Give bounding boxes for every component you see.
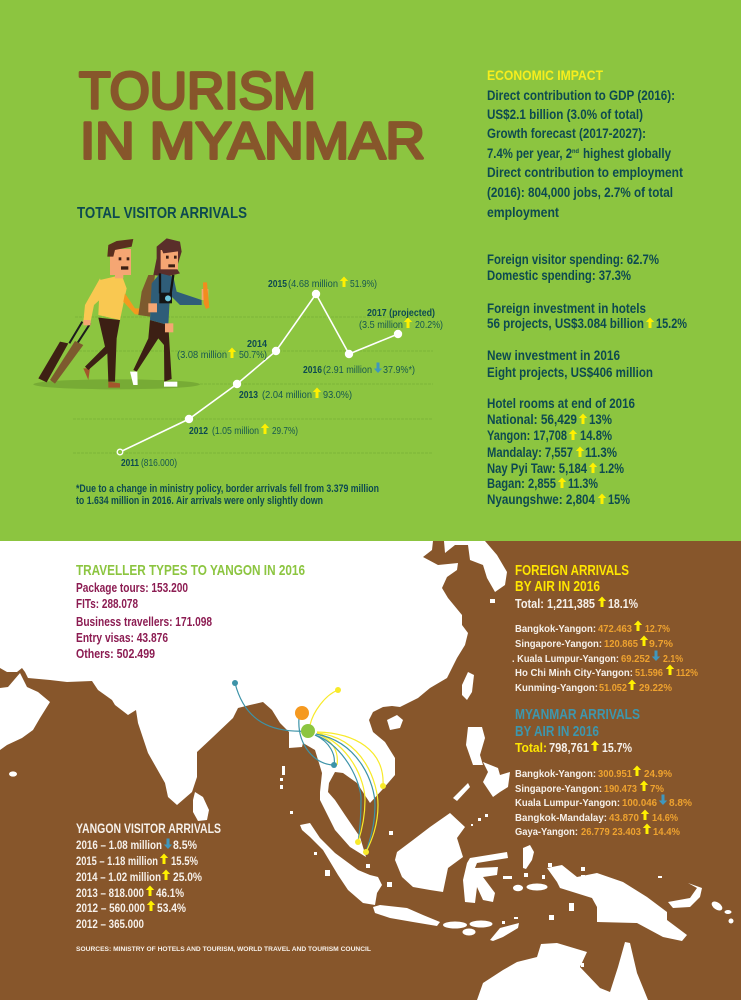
text block: foreign investment in hotels: 15.2%	[656, 316, 687, 331]
data label: 2015	[268, 276, 377, 290]
total: Myanmar arrivals	[515, 740, 632, 755]
heading: foreign arrivals: BY AIR IN 2016	[515, 579, 600, 595]
text block: hotel rooms: 15%	[608, 492, 630, 507]
list: foreign routes: 51.052	[599, 682, 627, 694]
text block: hotel rooms: National: 56,429	[487, 412, 577, 427]
data label: 2012: 29.7%)	[272, 425, 298, 437]
list: Myanmar routes: Bangkok-Yangon:	[515, 768, 596, 780]
text block: hotel rooms: 11.3%	[585, 445, 617, 460]
illustration: two travellers with suitcase	[33, 238, 209, 389]
list: Myanmar routes: Singapore-Yangon:	[515, 783, 602, 795]
data label: 2014: (3.08 million	[177, 349, 227, 361]
data label: 2013: 93.0%)	[323, 389, 352, 401]
text block: hotel rooms: Mandalay: 7,557	[487, 445, 573, 460]
list: Yangon arrivals by year: 15.5%	[171, 856, 198, 868]
data label: 2014: 2014	[247, 338, 267, 350]
list: Myanmar routes: 100.046	[622, 797, 657, 809]
heading: Myanmar arrivals: MYANMAR ARRIVALS	[515, 707, 640, 723]
data label: 2011: (816.000)	[141, 457, 177, 469]
text block: GDP, growth and employment: (2016): 804,000 jobs, 2.7% of total	[487, 185, 673, 200]
heading: economic impact: ECONOMIC IMPACT	[487, 67, 603, 83]
text block: hotel rooms: 11.3%	[568, 476, 598, 491]
data label: 2017 projected: 2017 (projected)	[367, 307, 435, 319]
text block: foreign investment in hotels	[487, 301, 687, 331]
data label: 2015: 2015	[268, 278, 287, 290]
data label: 2015: 51.9%)	[350, 278, 377, 290]
text block: new investment: New investment in 2016	[487, 348, 620, 363]
list: foreign routes: Bangkok-Yangon:	[515, 623, 596, 635]
list: Myanmar routes: 26.779 23.403	[581, 826, 641, 838]
list: foreign routes: 51.596	[635, 667, 663, 679]
list: Myanmar routes: Bangkok-Mandalay:	[515, 812, 607, 824]
data label: 2017 projected	[359, 307, 443, 331]
list: Yangon arrivals by year: 2014 – 1.02 million	[76, 872, 161, 884]
list: foreign routes: 69.252	[621, 653, 650, 665]
panel: Myanmar arrivals by air	[515, 707, 693, 838]
list: traveller types: Package tours: 153.200	[76, 581, 188, 595]
footnote	[76, 483, 379, 507]
list: foreign routes	[512, 620, 699, 694]
list: Yangon arrivals by year: 2013 – 818.000	[76, 888, 144, 900]
text block: hotel rooms: 14.8%	[580, 428, 612, 443]
list: Yangon arrivals by year: 46.1%	[156, 888, 184, 900]
text block: GDP, growth and employment: nd	[572, 149, 579, 155]
list: foreign routes: Singapore-Yangon:	[515, 638, 602, 650]
text block: foreign investment in hotels: 56 projects, US$3.084 billion	[487, 316, 644, 331]
panel: foreign arrivals by air	[512, 563, 699, 694]
panel: traveller types to Yangon	[76, 562, 305, 661]
footnote: *Due to a change in ministry policy, border arrivals fell from 3.379 million	[76, 483, 379, 495]
heading: foreign arrivals: FOREIGN ARRIVALS	[515, 563, 629, 579]
list: Yangon arrivals by year	[76, 838, 202, 931]
text block: hotel rooms: Yangon: 17,708	[487, 428, 567, 443]
text block: new investment	[487, 348, 653, 380]
heading: Myanmar arrivals: BY AIR IN 2016	[515, 724, 599, 740]
list: Myanmar routes: 14.4%	[653, 826, 681, 838]
total: foreign arrivals: Total: 1,211,385	[515, 596, 595, 611]
list: Myanmar routes: Kuala Lumpur-Yangon:	[515, 797, 620, 809]
data label: 2016: 2016	[303, 364, 322, 376]
data label: 2016	[303, 362, 415, 376]
data label: 2012: 2012	[189, 425, 208, 437]
title: IN MYANMAR	[80, 112, 425, 170]
line chart: total visitor arrivals	[73, 276, 443, 469]
list: foreign routes: 9.7%	[649, 638, 674, 650]
list: Myanmar routes: 24.9%	[644, 768, 673, 780]
text block: spending split: Domestic spending: 37.3%	[487, 268, 631, 283]
text block: GDP, growth and employment	[487, 88, 683, 220]
list: foreign routes: 2.1%	[663, 653, 684, 665]
heading: traveller types: TRAVELLER TYPES TO YANGON IN 2016	[76, 562, 305, 579]
list: foreign routes: Kunming-Yangon:	[515, 682, 598, 694]
list: Myanmar routes: 190.473	[604, 783, 637, 795]
text block: GDP, growth and employment: employment	[487, 205, 559, 220]
list: Myanmar routes: 8.8%	[669, 797, 693, 809]
heading: total visitor arrivals: TOTAL VISITOR ARRIVALS	[77, 205, 247, 222]
heading: Myanmar arrivals	[515, 707, 640, 740]
text block: GDP, growth and employment: Direct contribution to GDP (2016):	[487, 88, 675, 103]
data label: 2013: (2.04 million	[262, 389, 312, 401]
list: Myanmar routes: 43.870	[609, 812, 639, 824]
panel: green header background	[0, 0, 741, 541]
list: foreign routes: 112%	[676, 667, 699, 679]
data label: 2015: (4.68 million	[288, 278, 338, 290]
list: Myanmar routes: 300.951	[598, 768, 632, 780]
data label: 2016: 37.9%*)	[383, 364, 415, 376]
list: foreign routes: 120.865	[604, 638, 638, 650]
title: TOURISM	[79, 62, 316, 120]
text block: GDP, growth and employment: Direct contribution to employment	[487, 165, 683, 180]
flight routes from Myanmar	[232, 680, 386, 855]
list: Myanmar routes: 14.6%	[652, 812, 679, 824]
list: foreign routes: 29.22%	[639, 682, 673, 694]
text block: spending split	[487, 252, 659, 283]
list: Yangon arrivals by year: 53.4%	[157, 903, 186, 915]
sources: SOURCES: MINISTRY OF HOTELS AND TOURISM, WORLD TRAVEL AND TOURISM COUNCIL	[76, 946, 371, 953]
list: traveller types: FITs: 288.078	[76, 597, 138, 611]
list: foreign routes: Ho Chi Minh City-Yangon:	[515, 667, 633, 679]
text block: GDP, growth and employment: highest globally	[583, 146, 671, 161]
list: Myanmar routes	[515, 766, 693, 838]
total: foreign arrivals: 18.1%	[608, 596, 638, 611]
text block: hotel rooms: 13%	[589, 412, 612, 427]
title	[79, 62, 425, 170]
map: Asia-Pacific sea and land	[0, 541, 741, 1000]
text block: hotel rooms: Hotel rooms at end of 2016	[487, 396, 635, 411]
text block: GDP, growth and employment: Growth forecast (2017-2027):	[487, 126, 646, 141]
list: Myanmar routes: Gaya-Yangon:	[515, 826, 578, 838]
list: foreign routes: . Kuala Lumpur-Yangon:	[512, 653, 619, 665]
list: traveller types: Entry visas: 43.876	[76, 631, 168, 645]
data label: 2011: 2011	[121, 457, 139, 469]
text block: foreign investment in hotels: Foreign investment in hotels	[487, 301, 646, 316]
data label: 2013: 2013	[239, 389, 258, 401]
text block: hotel rooms: Nyaungshwe: 2,804	[487, 492, 595, 507]
data label: 2012	[189, 424, 298, 437]
text block: spending split: Foreign visitor spending: 62.7%	[487, 252, 659, 267]
list: traveller types: Business travellers: 171.098	[76, 615, 212, 629]
footnote: to 1.634 million in 2016. Air arrivals were only slightly down	[76, 495, 323, 507]
data label: 2012: (1.05 million	[212, 425, 259, 437]
list: Yangon arrivals by year: 2016 – 1.08 million	[76, 840, 162, 852]
text block: hotel rooms: 1.2%	[599, 461, 624, 476]
list: Yangon arrivals by year: 2012 – 365.000	[76, 919, 144, 931]
panel: Yangon visitor arrivals	[76, 820, 371, 953]
data label: 2017 projected: (3.5 million	[359, 319, 403, 331]
list: Myanmar routes: 7%	[650, 783, 665, 795]
data label: 2014: 50.7%)	[239, 349, 267, 361]
total: Myanmar arrivals: 798,761	[549, 740, 589, 755]
heading: foreign arrivals	[515, 563, 629, 595]
text block: GDP, growth and employment: US$2.1 billion (3.0% of total)	[487, 107, 643, 122]
text block: hotel rooms: Nay Pyi Taw: 5,184	[487, 461, 587, 476]
data label: 2014	[177, 338, 267, 361]
data label: 2017 projected: 20.2%)	[415, 319, 443, 331]
data label: 2011	[121, 457, 177, 469]
text block: hotel rooms	[487, 396, 635, 507]
text block: new investment: Eight projects, US$406 million	[487, 365, 653, 380]
heading: Yangon visitor arrivals: YANGON VISITOR ARRIVALS	[76, 820, 221, 836]
list: traveller types: Others: 502.499	[76, 647, 155, 661]
text block: hotel rooms: Bagan: 2,855	[487, 476, 556, 491]
list: Yangon arrivals by year: 8.5%	[173, 840, 197, 852]
total: Myanmar arrivals: Total:	[515, 740, 547, 755]
list: foreign routes: 472.463	[598, 623, 632, 635]
list: Yangon arrivals by year: 2015 – 1.18 million	[76, 856, 158, 868]
list: Yangon arrivals by year: 2012 – 560.000	[76, 903, 145, 915]
panel: economic impact	[487, 67, 687, 507]
list: traveller types	[76, 581, 212, 661]
text block: GDP, growth and employment: 7.4% per year, 2	[487, 146, 572, 161]
list: Yangon arrivals by year: 25.0%	[173, 872, 202, 884]
data label: 2013	[239, 388, 352, 401]
total: Myanmar arrivals: 15.7%	[602, 740, 632, 755]
data label: 2016: (2.91 million	[323, 364, 372, 376]
list: foreign routes: 12.7%	[645, 623, 671, 635]
